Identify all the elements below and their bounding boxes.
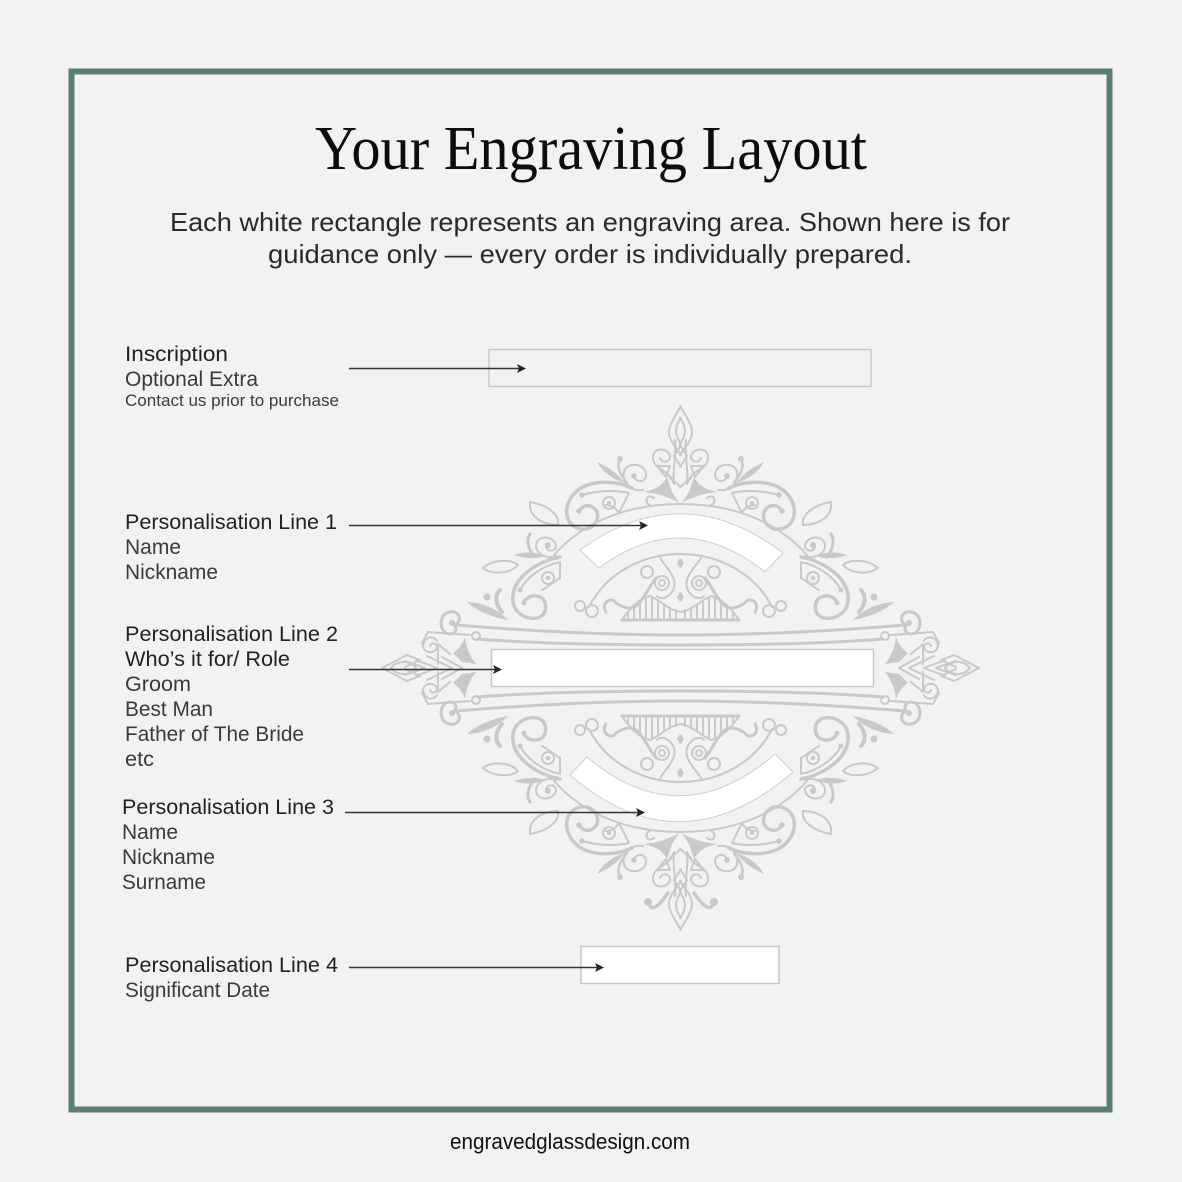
label: personalisation line 1: Nickname [125, 561, 218, 584]
engraving area: line 4 [581, 946, 779, 984]
label: personalisation line 2: Groom [125, 673, 191, 696]
ornament: engraving crest [382, 406, 979, 930]
title: Your Engraving Layout [315, 115, 867, 183]
label: inscription: Optional Extra [125, 368, 258, 391]
label: inscription: Contact us prior to purchase [125, 391, 339, 410]
engraving area: inscription [489, 350, 871, 386]
label: personalisation line 4: Significant Date [125, 979, 270, 1002]
label: personalisation line 2 [125, 623, 338, 771]
label: personalisation line 1: Personalisation Line 1 [125, 511, 337, 534]
label: personalisation line 4: Personalisation Line 4 [125, 954, 338, 977]
frame [72, 72, 1110, 1110]
engraving area: line 1 arc [580, 514, 783, 572]
footer website: engravedglassdesign.com [450, 1129, 690, 1154]
intro text [170, 207, 1010, 269]
large upper scroll [530, 482, 632, 529]
label: personalisation line 2: etc [125, 748, 154, 771]
mirrored quadrants [678, 406, 979, 668]
label: personalisation line 3: Surname [122, 871, 206, 894]
arrow: line 1 [349, 521, 648, 530]
top finial [653, 406, 681, 487]
label: personalisation line 1: Name [125, 536, 181, 559]
label: personalisation line 2: Personalisation Line 2 [125, 623, 338, 646]
inner dome scrolls [575, 558, 683, 617]
intro text: Each white rectangle represents an engraving area. Shown here is for [170, 207, 1010, 237]
intro text: guidance only — every order is individually prepared. [268, 239, 912, 269]
label: personalisation line 2: Best Man [125, 698, 213, 721]
label: inscription: Inscription [125, 343, 228, 366]
label: personalisation line 1 [125, 511, 337, 584]
arrow: line 4 [349, 963, 604, 972]
label: personalisation line 3: Nickname [122, 846, 215, 869]
left scroll [467, 557, 560, 620]
label: personalisation line 4 [125, 954, 338, 1002]
label: inscription [125, 343, 339, 410]
hatched half dome [622, 596, 681, 620]
wedge and curls [597, 456, 679, 505]
engraving area: line 3 arc [570, 754, 793, 822]
label: personalisation line 3 [122, 796, 334, 894]
arch bands [554, 504, 681, 607]
label: personalisation line 3: Personalisation Line 3 [122, 796, 334, 819]
label: personalisation line 2: Father of The Bride [125, 723, 304, 746]
banner rails [441, 612, 681, 645]
bottom curls [644, 893, 718, 908]
engraving area: line 2 [492, 650, 874, 686]
side finial [382, 632, 476, 668]
label: personalisation line 3: Name [122, 821, 178, 844]
arrow: line 3 [345, 808, 645, 817]
arrow: line 2 [349, 665, 502, 674]
side curls [483, 534, 556, 573]
label: personalisation line 2: Who’s it for/ Role [125, 648, 290, 671]
arrow: inscription [349, 364, 526, 373]
